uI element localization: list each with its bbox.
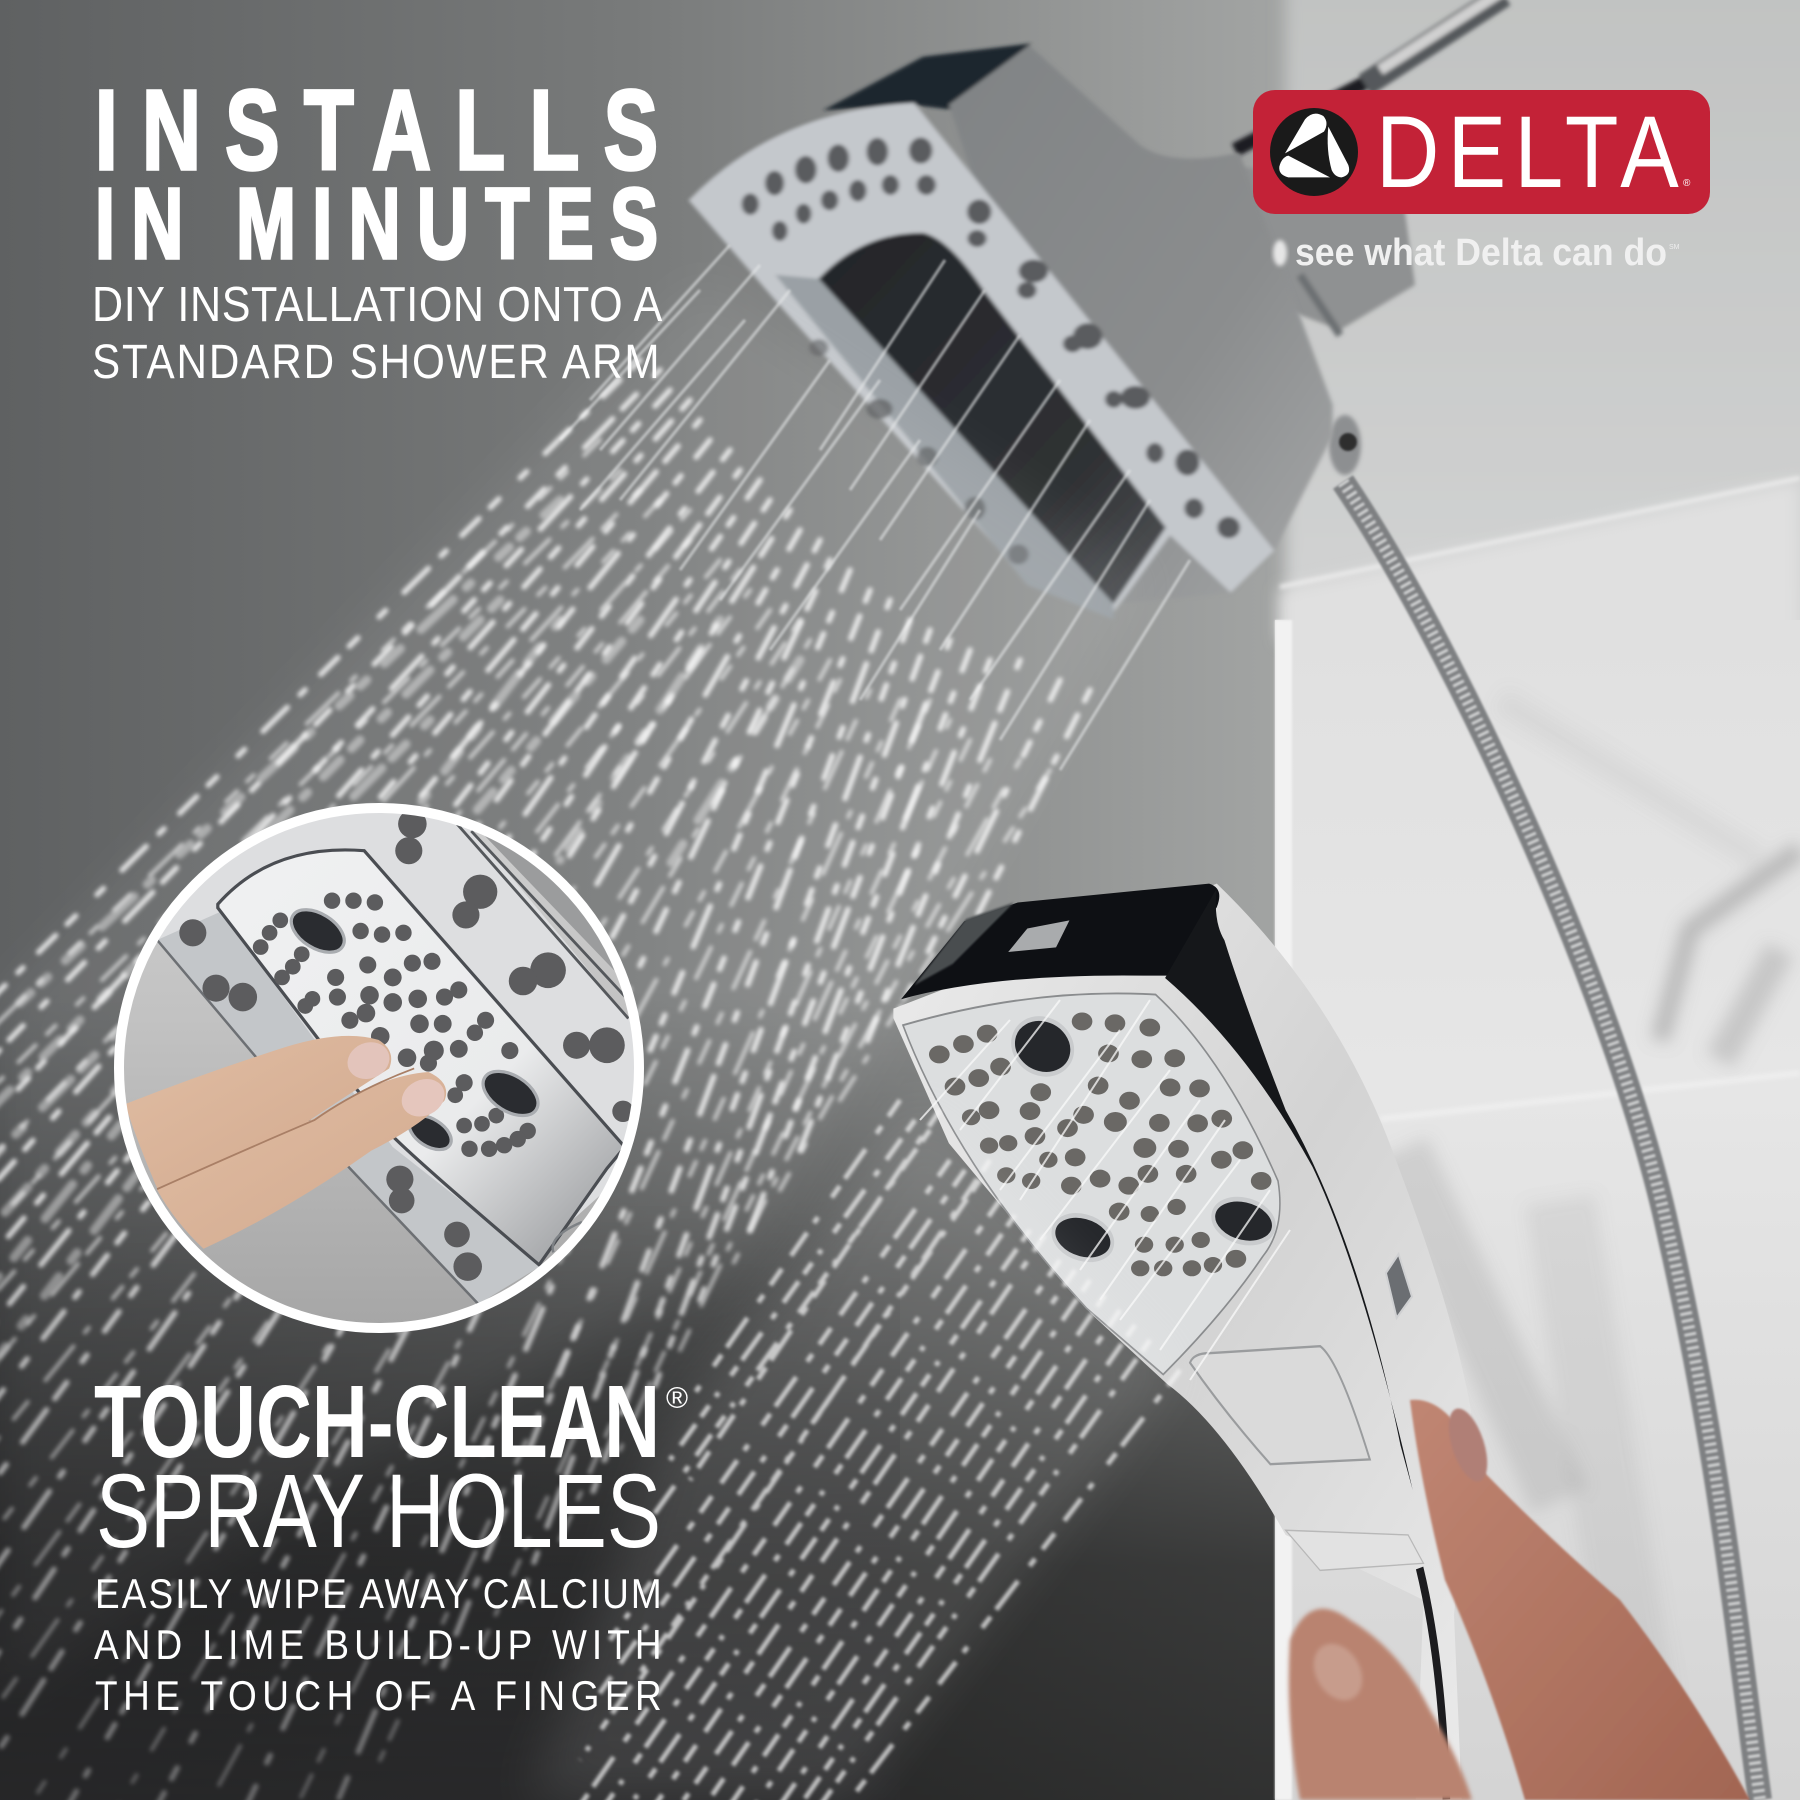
lower chrome band	[775, 275, 1114, 619]
soft spray haze	[0, 280, 1150, 1700]
finger: rear	[1410, 1400, 1750, 1800]
description line 1: DIY INSTALLATION ONTO A	[92, 276, 662, 332]
spray holes	[742, 138, 1240, 564]
title line 2: IN MINUTES	[95, 168, 658, 280]
tagline	[1273, 232, 1680, 274]
fingernail: front	[1304, 1635, 1372, 1709]
hose connector line	[1420, 1568, 1446, 1799]
thin streams near head	[560, 245, 1190, 770]
description line 2: STANDARD SHOWER ARM	[92, 334, 660, 389]
water spray: hand shower	[530, 1000, 1290, 1800]
head top edge	[901, 884, 1219, 999]
heading: touch-clean spray holes	[94, 1364, 688, 1720]
tagline droplet	[1273, 240, 1287, 266]
spray holes	[929, 1012, 1272, 1276]
finger: front	[1289, 1609, 1472, 1800]
head top edge	[823, 43, 1031, 110]
inset upper finger	[125, 1036, 391, 1188]
title light line: SPRAY HOLES	[96, 1453, 661, 1570]
spray face	[689, 103, 1274, 612]
inset small button	[553, 1222, 582, 1252]
inset large jets	[284, 901, 546, 1157]
registered mark: ®	[1683, 178, 1691, 189]
title bold line: TOUCH-CLEAN	[94, 1364, 660, 1479]
logo emblem triangle	[1279, 114, 1349, 177]
bright soft droplets	[0, 500, 800, 1380]
head body	[949, 45, 1333, 604]
registered mark: ®	[666, 1382, 688, 1415]
thin streams on face	[920, 1000, 1290, 1380]
background: marble tile wall	[1275, 0, 1800, 1800]
chrome hose	[1329, 415, 1760, 1800]
dark window reflection	[819, 233, 1166, 604]
description line 1: EASILY WIPE AWAY CALCIUM	[95, 1571, 662, 1618]
side window	[1386, 1254, 1412, 1318]
inset edge lines	[457, 824, 636, 1018]
shower arm and mount	[1190, 0, 1504, 335]
inset band edge	[157, 940, 478, 1304]
large jets	[1009, 1012, 1277, 1266]
dim droplets toward the bottom	[0, 1200, 900, 1800]
inset shower head plate	[159, 813, 634, 1220]
spray face	[903, 993, 1280, 1374]
heading: installs in minutes	[92, 67, 662, 389]
inset lower finger	[157, 1072, 446, 1249]
description line 2: AND LIME BUILD-UP WITH	[94, 1622, 662, 1669]
hand holding the shower	[1289, 1400, 1750, 1800]
description line 3: THE TOUCH OF A FINGER	[95, 1673, 662, 1720]
inset circle: finger wiping spray holes	[119, 804, 660, 1328]
water spray: upper head	[0, 245, 1190, 1800]
inset spray holes	[179, 810, 634, 1281]
logo red badge	[1253, 90, 1710, 214]
title line 1: INSTALLS	[95, 67, 658, 193]
inset finger crease	[157, 1068, 414, 1189]
inset face	[218, 850, 625, 1265]
dark reflection along edge	[1165, 888, 1413, 1490]
logo emblem circle	[1270, 108, 1358, 196]
inset fingernails	[348, 1042, 390, 1079]
inset white ring	[119, 808, 639, 1328]
inset lower band	[157, 911, 543, 1304]
dashed droplets	[0, 360, 1090, 1800]
soft lower spray haze	[530, 1100, 1180, 1800]
top edge texture	[914, 902, 1014, 985]
fingernail: rear	[1441, 1404, 1495, 1486]
lower hand shower head	[893, 884, 1471, 1799]
handle button panel	[1190, 1346, 1370, 1464]
handle lower panel	[1286, 1530, 1423, 1570]
top edge button	[1008, 920, 1069, 952]
Delta logo	[1253, 90, 1710, 214]
handle and body	[893, 884, 1471, 1799]
logo wordmark: DELTA	[1376, 96, 1679, 210]
upper shower head	[689, 43, 1333, 619]
dashed streams	[570, 1100, 1180, 1800]
service mark: SM	[1669, 244, 1680, 251]
inset background strip	[485, 836, 615, 971]
tagline text: see what Delta can do	[1295, 232, 1667, 274]
